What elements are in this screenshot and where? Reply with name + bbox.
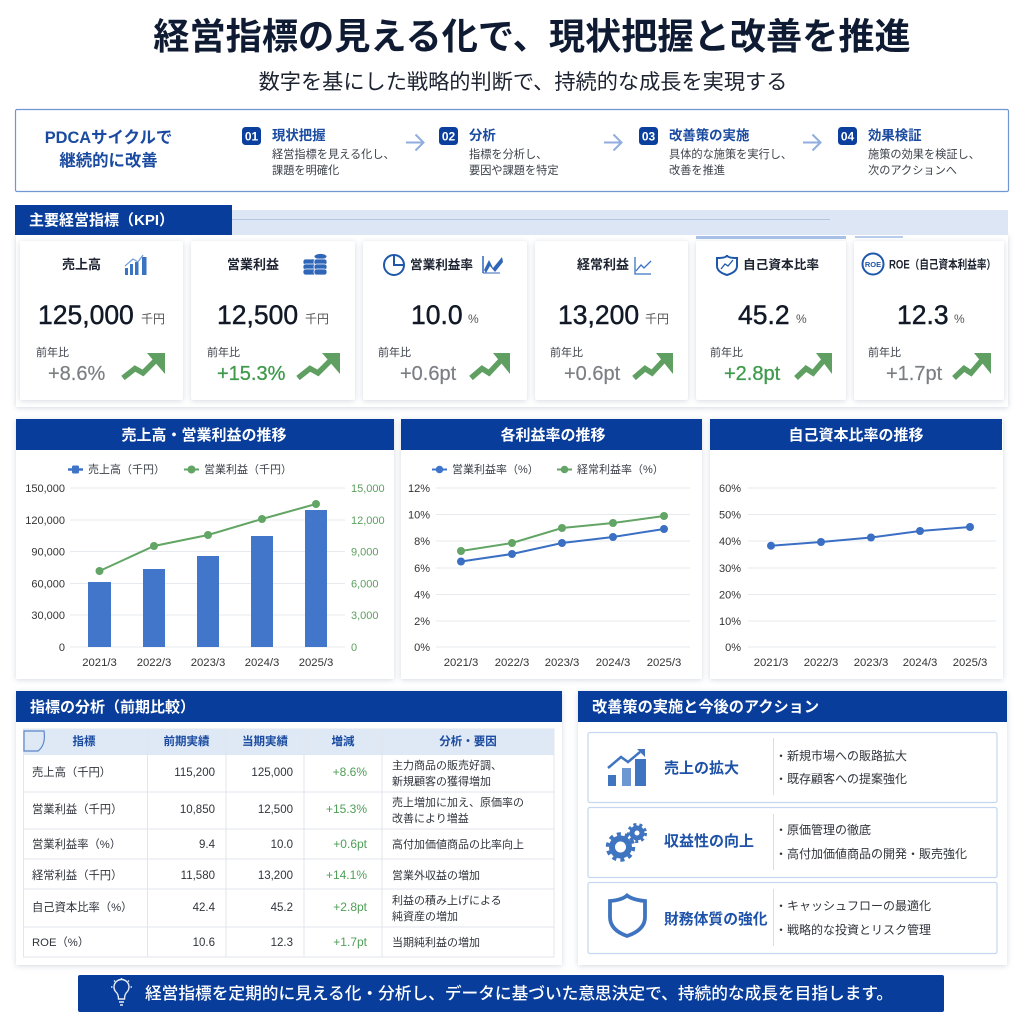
row: ROE: 12.3 <box>271 937 293 949</box>
bar and line chart: 15,000 <box>351 483 385 495</box>
KPI card: 経常利益: 千円 <box>645 312 669 326</box>
comparison table: 増減 <box>332 734 355 748</box>
step 01: 現状把握 <box>272 127 326 143</box>
icon: mini chart <box>483 256 503 273</box>
KPI heading: 主要経営指標（KPI） <box>29 211 174 229</box>
line chart: 8% <box>414 536 430 548</box>
action card: sales: ・新規市場への販路拡大 <box>775 748 907 763</box>
bar and line chart: 120,000 <box>25 515 65 527</box>
action card: profitability: ・原価管理の徹底 <box>775 822 871 837</box>
row: 売上高: 新規顧客の獲得増加 <box>392 774 491 788</box>
bar and line chart: 0 <box>351 642 357 654</box>
icon: bars <box>125 255 146 275</box>
icon: up arrow <box>298 353 340 378</box>
panel: PDCA cycle <box>16 110 1008 192</box>
action card: financial strength: ・戦略的な投資とリスク管理 <box>775 922 931 937</box>
action card: financial strength: 財務体質の強化 <box>664 911 768 928</box>
KPI card: 自己資本比率: +2.8pt <box>724 363 781 385</box>
row: ROE: 10.6 <box>193 937 215 949</box>
footer banner <box>78 975 944 1012</box>
subtitle: 数字を基にした戦略的判断で、持続的な成長を実現する <box>259 70 787 94</box>
bar and line chart: 3,000 <box>351 610 379 622</box>
icon: up arrow <box>123 353 165 378</box>
KPI heading <box>15 205 232 235</box>
step 02 <box>439 127 559 177</box>
KPI card: 経常利益: 前年比 <box>550 345 583 359</box>
line chart: 2025/3 <box>647 657 681 669</box>
row: 営業利益率: 営業利益率（%） <box>32 837 121 851</box>
bar and line chart: 2021/3 <box>82 657 117 669</box>
bar and line chart: 0 <box>59 642 65 654</box>
action card: profitability: 収益性の向上 <box>664 833 754 850</box>
icon: line chart <box>635 257 651 274</box>
KPI card: 売上高: 125,000 <box>38 300 134 330</box>
row: ROE: ROE（%） <box>32 936 89 949</box>
step 01: 課題を明確化 <box>272 164 339 177</box>
bar and line chart: 12,000 <box>351 515 385 527</box>
row: ROE <box>32 935 480 949</box>
panel: equity ratio chart <box>710 419 1003 679</box>
step 01 <box>242 127 395 177</box>
icon: up arrow <box>954 353 991 378</box>
row: 経常利益 <box>32 868 480 882</box>
KPI card: 売上高: +8.6% <box>48 363 105 385</box>
KPI card: 売上高: 千円 <box>141 312 165 326</box>
panel: improvement actions <box>578 691 1007 965</box>
row: 経常利益: 営業外収益の増加 <box>392 868 480 882</box>
step 01: 経営指標を見える化し、 <box>272 147 395 161</box>
line chart <box>719 483 996 669</box>
line chart: 6% <box>414 563 430 575</box>
arrow 2 <box>604 134 622 150</box>
row: 自己資本比率: 利益の積み上げによる <box>392 893 502 907</box>
row: 営業利益: 10,850 <box>180 804 215 816</box>
bar and line chart: 2023/3 <box>191 657 225 669</box>
KPI card: 経常利益: 13,200 <box>558 300 639 330</box>
KPI card: 営業利益: 千円 <box>305 312 329 326</box>
row: 営業利益: 改善により増益 <box>392 811 469 825</box>
icon: shield <box>610 896 645 936</box>
line chart: 0% <box>414 642 430 654</box>
step 04: 施策の効果を検証し、 <box>868 147 980 161</box>
line chart: 2022/3 <box>804 657 838 669</box>
bar and line chart: 150,000 <box>25 483 65 495</box>
line chart: 2% <box>414 616 430 628</box>
action card: sales: 売上の拡大 <box>664 759 739 777</box>
line chart: 12% <box>408 483 430 495</box>
KPI card: ROE <box>854 241 1004 400</box>
row: 自己資本比率 <box>32 893 502 923</box>
row: 自己資本比率: 純資産の増加 <box>392 909 458 923</box>
PDCA heading: 継続的に改善 <box>59 152 158 170</box>
line chart: 10% <box>719 616 741 628</box>
KPI card: ROE: ROE（自己資本利益率） <box>889 256 996 272</box>
KPI card: 自己資本比率 <box>696 241 846 400</box>
comparison table: 指標 <box>72 734 96 748</box>
line chart <box>408 483 690 669</box>
bar and line chart <box>25 483 385 669</box>
step 03: 03 <box>642 130 655 144</box>
legend: 営業利益（千円） <box>204 462 292 476</box>
bar and line chart: 60,000 <box>31 578 65 590</box>
line chart: 2024/3 <box>903 657 937 669</box>
row: 営業利益: +15.3% <box>326 802 367 816</box>
bar and line chart: 9,000 <box>351 546 379 558</box>
arrow 1 <box>406 134 424 150</box>
title: 経営指標の見える化で、現状把握と改善を推進 <box>153 16 911 57</box>
icon: up arrow <box>634 353 673 378</box>
line chart: 10% <box>408 510 430 522</box>
icon: ROE badge: ROE <box>865 260 881 269</box>
icon: growth chart <box>608 749 646 786</box>
KPI card: 売上高: 売上高 <box>62 257 101 272</box>
comparison table: 当期実績 <box>242 734 288 748</box>
KPI card: ROE: % <box>954 312 965 326</box>
icon: light bulb <box>111 978 132 1005</box>
line chart: 2022/3 <box>495 657 529 669</box>
KPI card: 売上高: 前年比 <box>36 345 69 359</box>
KPI card: 営業利益率: 10.0 <box>411 300 463 330</box>
row: 営業利益: 営業利益（千円） <box>32 802 122 816</box>
line chart: 30% <box>719 563 741 575</box>
KPI card: 営業利益率: % <box>468 312 479 326</box>
legend: 売上高（千円） <box>88 462 165 476</box>
comparison table <box>24 729 554 957</box>
KPI card: 自己資本比率: 45.2 <box>738 300 790 330</box>
action card: profitability <box>588 808 997 878</box>
icon: gears <box>608 824 646 860</box>
KPI card: 営業利益: 営業利益 <box>227 257 279 272</box>
legend: 営業利益率（%） <box>452 462 539 476</box>
bar and line chart: 6,000 <box>351 578 379 590</box>
KPI card: 営業利益: 12,500 <box>217 300 298 330</box>
legend <box>432 462 664 476</box>
KPI card: 経常利益: +0.6pt <box>564 363 621 385</box>
KPI card: 自己資本比率: 前年比 <box>710 345 743 359</box>
icon: up arrow <box>471 353 510 378</box>
bar and line chart: 90,000 <box>31 546 65 558</box>
KPI card: ROE: 前年比 <box>868 345 901 359</box>
line chart: 2025/3 <box>953 657 987 669</box>
legend: 経常利益率（%） <box>577 462 664 476</box>
row: 営業利益率: 高付加価値商品の比率向上 <box>392 837 524 851</box>
line chart: 2021/3 <box>444 657 478 669</box>
row: 売上高: 売上高（千円） <box>32 766 111 779</box>
line chart: 60% <box>719 483 741 495</box>
bar and line chart: 30,000 <box>31 610 65 622</box>
line chart: 50% <box>719 510 741 522</box>
KPI card: 営業利益: +15.3% <box>217 363 286 385</box>
step 02: 指標を分析し、 <box>469 147 547 161</box>
actions heading: 改善策の実施と今後のアクション <box>592 698 819 716</box>
footer banner: 経営指標を定期的に見える化・分析し、データに基づいた意思決定で、持続的な成長を目指します。 <box>145 983 893 1003</box>
row: 売上高: 115,200 <box>174 767 215 779</box>
line chart: 4% <box>414 590 430 602</box>
KPI card: 自己資本比率: 自己資本比率 <box>743 257 819 272</box>
KPI card: 営業利益率: 営業利益率 <box>410 257 473 272</box>
action card: profitability: ・高付加価値商品の開発・販売強化 <box>775 846 967 861</box>
action card: sales: ・既存顧客への提案強化 <box>775 771 907 786</box>
row: 営業利益率: +0.6pt <box>333 837 368 851</box>
row: 営業利益: 12,500 <box>258 804 293 816</box>
bar and line chart: 2025/3 <box>299 657 333 669</box>
step 04 <box>838 127 980 177</box>
comparison table: 前期実績 <box>164 734 210 748</box>
KPI card: 営業利益率: +0.6pt <box>400 363 457 385</box>
bar and line chart: 2024/3 <box>245 657 279 669</box>
table heading: 指標の分析（前期比較） <box>30 698 195 716</box>
step 03 <box>639 127 792 177</box>
PDCA heading: PDCAサイクルで <box>45 129 172 147</box>
row: 営業利益率: 9.4 <box>199 839 216 851</box>
line chart: 40% <box>719 536 741 548</box>
row: 経常利益: +14.1% <box>326 868 367 882</box>
step 04: 効果検証 <box>868 127 922 143</box>
step 04: 次のアクションへ <box>868 164 957 177</box>
icon: ROE badge <box>862 254 884 274</box>
line chart: 2024/3 <box>596 657 630 669</box>
bar and line chart: 2022/3 <box>137 657 171 669</box>
panel: KPI <box>15 205 1008 407</box>
step 02: 要因や課題を特定 <box>469 163 559 177</box>
action card: sales <box>588 732 997 802</box>
line chart: 2023/3 <box>854 657 888 669</box>
KPI card: ROE: 12.3 <box>897 300 949 330</box>
step 01: 01 <box>245 130 258 144</box>
panel: profit margin chart <box>401 419 702 679</box>
row: 自己資本比率: +2.8pt <box>333 900 368 914</box>
step 03: 具体的な施策を実行し、 <box>669 147 792 161</box>
KPI card: 売上高 <box>20 241 183 400</box>
row: 自己資本比率: 自己資本比率（%） <box>32 900 132 914</box>
line chart: 2023/3 <box>545 657 579 669</box>
row: 経常利益: 13,200 <box>258 870 293 882</box>
row: ROE: 当期純利益の増加 <box>392 935 480 949</box>
chart heading: 自己資本比率の推移 <box>788 426 924 444</box>
action card: financial strength: ・キャッシュフローの最適化 <box>775 899 931 913</box>
row: 売上高: +8.6% <box>333 765 367 779</box>
action card: financial strength <box>588 882 997 954</box>
line chart: 0% <box>725 642 741 654</box>
chart heading: 各利益率の推移 <box>500 426 606 444</box>
icon: pie <box>384 255 404 275</box>
KPI card: 営業利益率 <box>363 241 527 400</box>
KPI card: 経常利益 <box>535 241 688 400</box>
icon: up arrow <box>796 353 832 378</box>
arrow 3 <box>803 134 820 150</box>
row: 営業利益率 <box>32 837 524 851</box>
row: 経常利益: 経常利益（千円） <box>32 868 122 882</box>
row: ROE: +1.7pt <box>333 935 368 949</box>
row: 営業利益 <box>32 796 524 825</box>
step 02: 02 <box>442 130 455 144</box>
row: 営業利益率: 10.0 <box>271 839 293 851</box>
step 03: 改善を推進 <box>669 163 725 177</box>
step 04: 04 <box>841 130 854 144</box>
panel: sales and operating profit chart <box>16 419 394 679</box>
row: 経常利益: 11,580 <box>181 870 215 882</box>
row: 売上高 <box>32 758 502 788</box>
panel: indicator analysis table <box>16 691 562 965</box>
KPI card: 自己資本比率: % <box>796 312 807 326</box>
KPI card: 営業利益率: 前年比 <box>378 345 411 359</box>
line chart: 2021/3 <box>754 657 788 669</box>
comparison table: 分析・要因 <box>439 734 497 748</box>
KPI card: 営業利益: 前年比 <box>207 345 240 359</box>
KPI card: ROE: +1.7pt <box>886 363 943 385</box>
step 03: 改善策の実施 <box>669 127 750 143</box>
row: 自己資本比率: 42.4 <box>193 902 216 914</box>
step 02: 分析 <box>469 127 496 143</box>
legend <box>68 462 292 476</box>
line chart: 20% <box>719 590 741 602</box>
KPI card: 営業利益 <box>191 241 355 400</box>
row: 自己資本比率: 45.2 <box>271 902 293 914</box>
row: 売上高: 125,000 <box>251 767 293 779</box>
row: 売上高: 主力商品の販売好調、 <box>392 758 502 772</box>
chart heading: 売上高・営業利益の推移 <box>121 426 287 444</box>
icon: coins <box>303 254 327 275</box>
KPI card: 経常利益: 経常利益 <box>577 257 629 272</box>
icon: shield <box>717 255 737 275</box>
row: 営業利益: 売上増加に加え、原価率の <box>392 796 524 809</box>
PDCA heading <box>45 129 172 170</box>
